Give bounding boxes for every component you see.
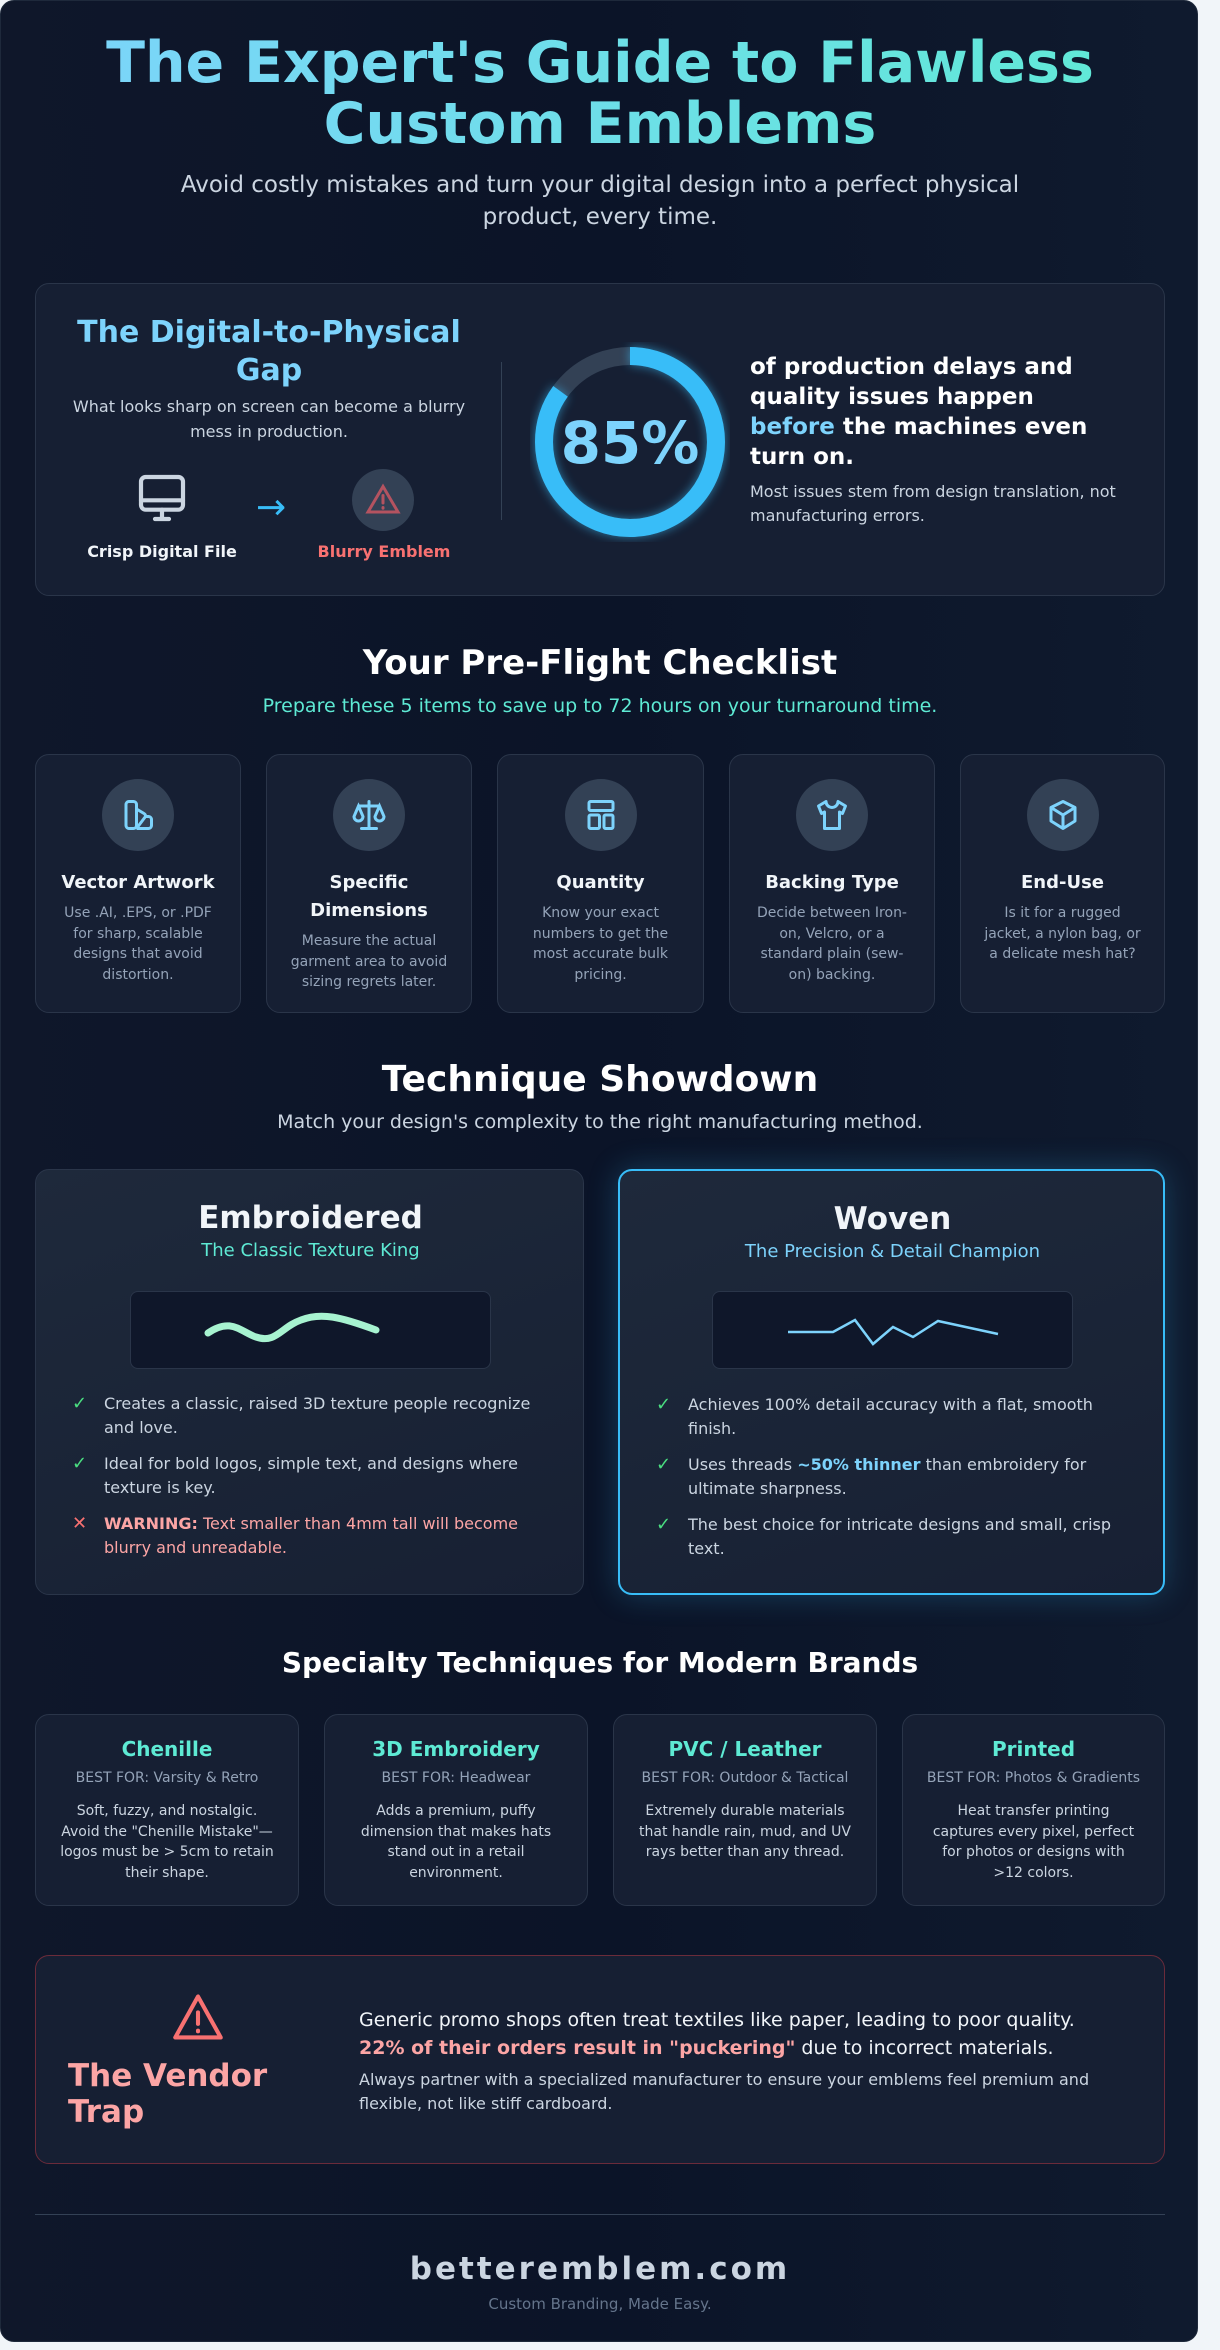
donut chart 85%: 85% (561, 409, 699, 477)
card: 3d embroidery: Adds a premium, puffy dimension that makes hats stand out in a retail environment. (361, 1803, 551, 1880)
card: 3d embroidery (324, 1714, 588, 1906)
panel: embroidered: ✕ (72, 1513, 87, 1534)
bullet 3 warning: WARNING: Text smaller than 4mm tall will become blurry and unreadable. (104, 1514, 518, 1557)
visual: wave (130, 1291, 491, 1369)
footer domain: betteremblem.com (410, 2251, 790, 2287)
card: chenille: Chenille (122, 1737, 212, 1761)
card: 3d embroidery: 3D Embroidery (372, 1737, 540, 1761)
card: vector artwork (35, 754, 241, 1013)
icon: artwork (102, 779, 174, 851)
card: pvc leather: PVC / Leather (668, 1737, 822, 1761)
panel: woven: ✓ (656, 1394, 671, 1415)
panel: digital-to-physical gap (35, 283, 1165, 596)
showdown subtitle: Match your design's complexity to the right manufacturing method. (277, 1111, 923, 1133)
panel: woven (618, 1169, 1165, 1595)
gap description: What looks sharp on screen can become a blurry mess in production. (73, 397, 465, 441)
visual: zigzag (712, 1291, 1073, 1369)
panel: woven: ✓ (656, 1514, 671, 1535)
donut chart 85% (530, 342, 730, 542)
card: chenille: Soft, fuzzy, and nostalgic. Avoid the "Chenille Mistake"—logos must be > 5cm to retain their shape. (60, 1803, 274, 1880)
icon: box (1026, 779, 1098, 851)
card: quantity (497, 754, 704, 1013)
card: dimensions: Measure the actual garment area to avoid sizing regrets later. (291, 933, 447, 990)
card: backing: Decide between Iron-on, Velcro, or a standard plain (sew-on) backing. (757, 905, 907, 982)
card: pvc leather (613, 1714, 877, 1906)
subtitle: Avoid costly mistakes and turn your digital design into a perfect physical product, every time. (181, 172, 1019, 230)
card: vector artwork: Use .AI, .EPS, or .PDF for sharp, scalable designs that avoid distortion. (64, 905, 212, 982)
label: crisp: Crisp Digital File (87, 542, 237, 561)
card: end-use (960, 754, 1165, 1013)
checklist subtitle: Prepare these 5 items to save up to 72 hours on your turnaround time. (263, 695, 937, 717)
label: blurry: Blurry Emblem (318, 542, 450, 561)
card: printed: BEST FOR: Photos & Gradients (927, 1770, 1140, 1786)
card: printed: Printed (992, 1737, 1075, 1761)
heading: checklist: Your Pre-Flight Checklist (363, 643, 837, 683)
card: quantity: Quantity (556, 872, 645, 893)
bullet 3: The best choice for intricate designs and small, crisp text. (688, 1515, 1111, 1558)
heading: specialty techniques: Specialty Techniques for Modern Brands (282, 1646, 918, 1679)
card: chenille (35, 1714, 299, 1906)
footer tagline: Custom Branding, Made Easy. (488, 2295, 712, 2313)
card: printed (902, 1714, 1165, 1906)
gap heading: The Digital-to-Physical Gap (77, 315, 461, 388)
title: Custom Emblems (324, 91, 876, 157)
icon: layout (564, 779, 636, 851)
card: backing (729, 754, 935, 1013)
panel: woven: ✓ (656, 1454, 671, 1475)
card: end-use: Is it for a rugged jacket, a nylon bag, or a delicate mesh hat? (984, 905, 1141, 962)
stat note: Most issues stem from design translation, not manufacturing errors. (750, 482, 1116, 525)
bullet 2: Ideal for bold logos, simple text, and designs where texture is key. (104, 1454, 518, 1497)
vendor trap heading: The Vendor Trap (68, 2058, 267, 2130)
card: end-use: End-Use (1021, 872, 1104, 893)
bullet 1: Achieves 100% detail accuracy with a flat, smooth finish. (688, 1395, 1093, 1438)
icon: warning circle (352, 469, 414, 531)
panel: embroidered: ✓ (72, 1453, 87, 1474)
title (1, 33, 1199, 155)
card: dimensions: Specific Dimensions (310, 872, 428, 921)
bullet 2: Uses threads ~50% thinner than embroidery for ultimate sharpness. (688, 1455, 1086, 1498)
panel: embroidered: ✓ (72, 1393, 87, 1414)
card: chenille: BEST FOR: Varsity & Retro (76, 1770, 258, 1786)
vendor text (359, 2009, 1075, 2059)
icon: monitor (138, 474, 186, 522)
card: pvc leather: Extremely durable materials that handle rain, mud, and UV rays better than any thread. (639, 1803, 851, 1860)
vendor text: 22% of their orders result in "puckering" due to incorrect materials. (359, 2037, 1054, 2059)
card: pvc leather: BEST FOR: Outdoor & Tactical (642, 1770, 848, 1786)
arrow: → (256, 487, 286, 528)
card: backing: Backing Type (765, 872, 899, 893)
vendor text: Generic promo shops often treat textiles like paper, leading to poor quality. (359, 2009, 1075, 2031)
icon: warning (173, 1994, 223, 2040)
vendor note: Always partner with a specialized manufacturer to ensure your emblems feel premium and flexible, not like stiff cardboard. (359, 2070, 1089, 2113)
heading: technique showdown: Technique Showdown (382, 1059, 818, 1100)
heading: Embroidered (198, 1200, 423, 1236)
sub heading: The Precision & Detail Champion (745, 1241, 1040, 1262)
stat text: of production delays and quality issues happen before the machines even turn on. (750, 354, 1087, 470)
icon: scale (333, 779, 405, 851)
card: quantity: Know your exact numbers to get the most accurate bulk pricing. (533, 905, 668, 982)
card: vector artwork: Vector Artwork (61, 872, 215, 893)
card: printed: Heat transfer printing captures every pixel, perfect for photos or designs with >12 colors. (933, 1803, 1134, 1880)
sub heading: The Classic Texture King (201, 1240, 420, 1261)
bullet 1: Creates a classic, raised 3D texture people recognize and love. (104, 1394, 530, 1437)
panel: embroidered (35, 1169, 584, 1595)
card: dimensions (266, 754, 472, 1013)
title: The Expert's Guide to Flawless (106, 30, 1094, 96)
card: 3d embroidery: BEST FOR: Headwear (382, 1770, 530, 1786)
panel: vendor trap (35, 1955, 1165, 2164)
heading: Woven (834, 1201, 951, 1237)
icon: shirt (796, 779, 868, 851)
